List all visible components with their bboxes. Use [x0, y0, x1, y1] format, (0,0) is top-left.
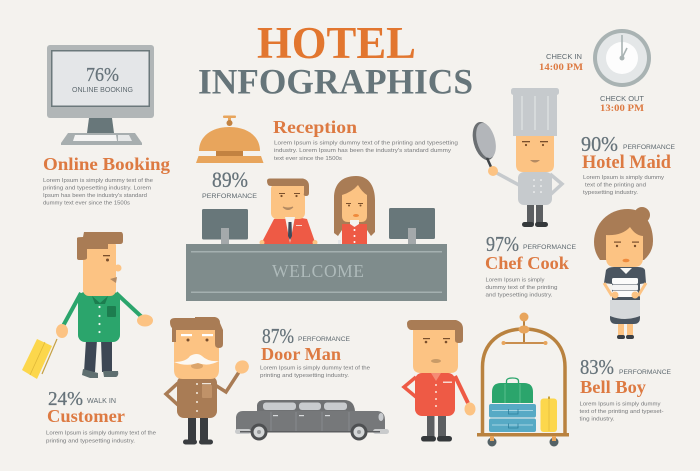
check in time: 14:00 PM: [539, 63, 583, 73]
text block: door man: Lorem Ipsum is simply dummy text of the: [260, 366, 370, 372]
text block: chef cook: 97%: [486, 232, 519, 256]
green bag: [492, 378, 533, 403]
text block: online booking: [43, 154, 170, 206]
text block: hotel maid: [581, 132, 675, 196]
blue suitcases: [489, 404, 536, 432]
text block: hotel maid: text of the printing and: [585, 182, 646, 188]
icon: reception bell: [196, 116, 264, 163]
receptionist woman: [334, 176, 375, 244]
hotel maid character: [594, 207, 653, 339]
text block: online booking: Online Booking: [43, 154, 170, 174]
text block: customer: printing and typesetting industry.: [46, 438, 135, 444]
check out time: CHECK OUT: [600, 94, 645, 103]
text block: chef cook: Lorem Ipsum is simply: [486, 278, 545, 284]
suitcase: [22, 339, 57, 379]
text block: customer: Customer: [47, 406, 125, 426]
text block: customer: Lorem Ipsum is simply dummy text of the: [46, 430, 156, 436]
text block: hotel maid: 90%: [581, 132, 618, 156]
check out time: [600, 94, 645, 114]
text block: chef cook: dummy text of the printing: [486, 285, 558, 291]
text block: door man: Door Man: [261, 344, 341, 364]
check in time: [539, 52, 583, 73]
text block: bell boy: [580, 355, 671, 422]
text block: reception: [273, 117, 458, 162]
title: [198, 18, 473, 102]
text block: hotel maid: typesetting industry.: [583, 190, 638, 196]
text block: bell boy: ting industry.: [580, 416, 615, 422]
luggage cart: [477, 312, 569, 446]
text block: bell boy: Bell Boy: [580, 377, 646, 397]
bell boy character: [404, 320, 476, 442]
text block: bell boy: Lorem Ipsum is simply dummy: [580, 402, 661, 408]
text block: hotel maid: Hotel Maid: [582, 153, 672, 173]
yellow suitcase: [540, 396, 557, 432]
text block: bell boy: text of the printing and typeset-: [580, 409, 664, 415]
check out time: 13:00 PM: [600, 104, 644, 114]
text block: chef cook: [485, 232, 576, 298]
desk computer left: [202, 209, 248, 245]
monitor label: ONLINE BOOKING: [72, 85, 133, 94]
text block: chef cook: and typesetting industry.: [486, 292, 553, 298]
welcome sign: WELCOME: [272, 261, 364, 281]
customer character: [22, 232, 153, 379]
check in time: CHECK IN: [546, 52, 582, 61]
text block: customer: WALK IN: [87, 398, 116, 405]
text block: bell boy: PERFORMANCE: [619, 369, 671, 376]
chef character: [469, 88, 562, 227]
text block: hotel maid: PERFORMANCE: [623, 144, 675, 151]
text block: online booking: Lorem Ipsum is simply dummy text of the: [43, 178, 153, 184]
text block: door man: [260, 324, 370, 379]
text block: online booking: Ipsum has been the industry's standard: [43, 193, 147, 199]
text block: reception: industry. Lorem Ipsum has been the industry's standard dummy: [274, 148, 451, 154]
receptionist man: [260, 178, 318, 245]
text block: reception: Reception: [273, 117, 357, 137]
text block: door man: PERFORMANCE: [298, 336, 350, 343]
text block: hotel maid: Lorem Ipsum is simply dummy: [583, 175, 664, 181]
reception desk: [186, 244, 447, 301]
text block: chef cook: Chef Cook: [485, 253, 569, 273]
title: INFOGRAPHICS: [198, 62, 473, 102]
text block: reception: Lorem Ipsum is simply dummy text of the printing and typesetting: [274, 140, 458, 146]
text block: door man: printing and typesetting industry.: [260, 373, 349, 379]
text block: online booking: dummy text ever since the 1500s: [43, 200, 130, 206]
text block: door man: 87%: [262, 324, 294, 348]
reception performance: PERFORMANCE: [202, 193, 257, 200]
text block: customer: 24%: [48, 388, 83, 410]
title: HOTEL: [257, 18, 416, 68]
frying pan: [469, 119, 499, 167]
text block: reception: text ever since the 1500s: [274, 156, 342, 162]
desk computer right: [389, 208, 435, 245]
text block: customer: [46, 388, 156, 444]
icon: limousine: [235, 400, 389, 440]
reception performance: 89%: [212, 167, 248, 192]
text block: online booking: printing and typesetting industry. Lorem: [43, 186, 151, 192]
door man character: [166, 317, 251, 444]
icon: computer monitor with keyboard: [47, 45, 154, 145]
icon: clock: [593, 29, 651, 87]
monitor percentage: 76%: [86, 64, 119, 86]
reception performance: [202, 167, 257, 200]
text block: bell boy: 83%: [580, 355, 614, 379]
text block: chef cook: PERFORMANCE: [523, 244, 576, 251]
